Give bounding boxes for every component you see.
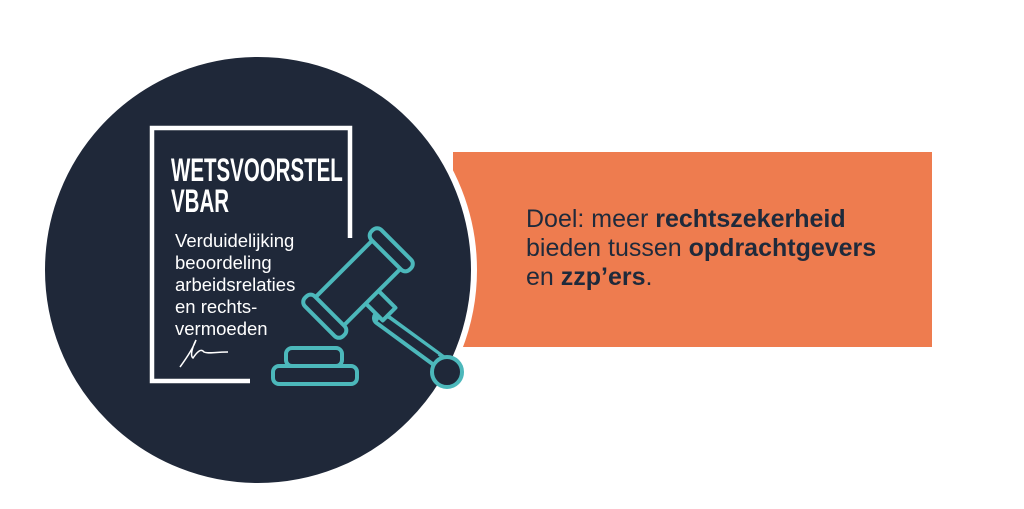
subtitle: en rechts- xyxy=(175,296,257,317)
title: WETSVOORSTEL xyxy=(171,152,343,188)
goal text xyxy=(526,205,876,291)
subtitle: vermoeden xyxy=(175,318,268,339)
document frame xyxy=(152,128,350,381)
subtitle: beoordeling xyxy=(175,252,272,273)
panel: orange goal box xyxy=(453,152,932,347)
title xyxy=(171,152,343,219)
dark circle xyxy=(42,54,474,486)
goal text: Doel: meer rechtszekerheid xyxy=(526,205,846,233)
subtitle: Verduidelijking xyxy=(175,230,294,251)
goal text: en zzp’ers. xyxy=(526,263,652,291)
goal text: bieden tussen opdrachtgevers xyxy=(526,234,876,262)
subtitle: arbeidsrelaties xyxy=(175,274,295,295)
signature xyxy=(180,340,228,367)
icon: gavel xyxy=(273,226,462,387)
title: VBAR xyxy=(171,183,229,219)
subtitle xyxy=(175,230,295,339)
